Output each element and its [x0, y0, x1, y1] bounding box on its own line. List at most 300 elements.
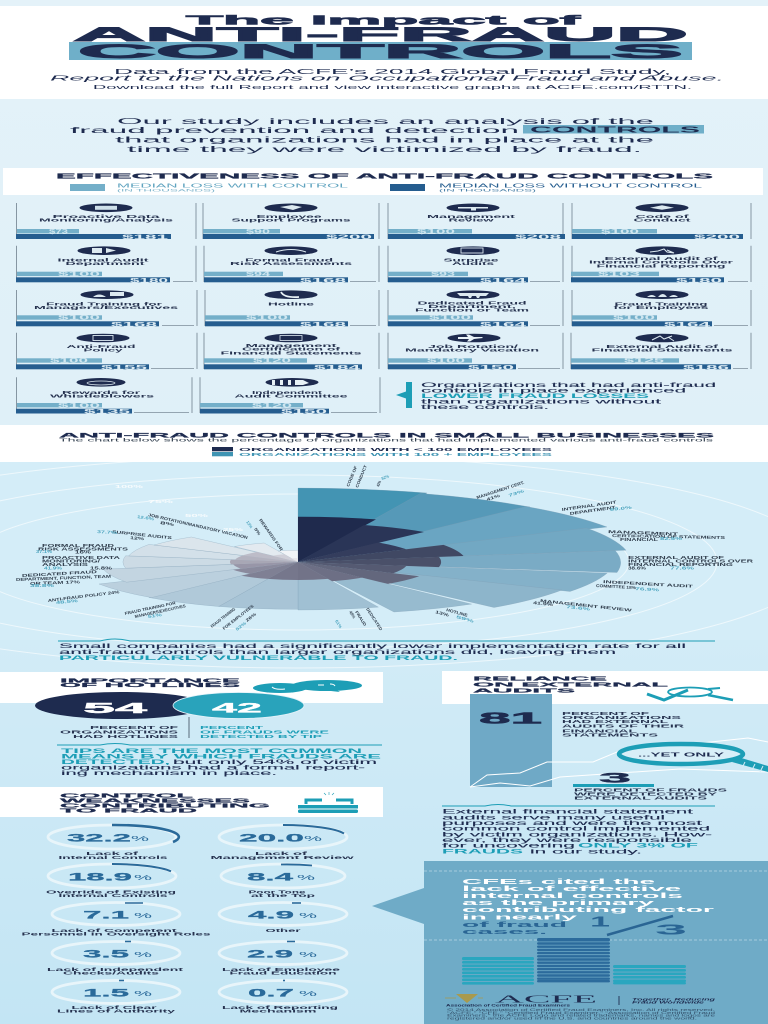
- chart: radial labels: REWARDS FOR: [258, 518, 284, 552]
- heading: OF HOTLINES: [60, 683, 241, 689]
- text: CFEs cited: cases.: [462, 927, 547, 936]
- text block: external audits paragraph: by victim organizations. How-: [442, 832, 712, 838]
- heading: TO FRAUD: [60, 808, 197, 814]
- card: Fraud Training for Employees: for Employees: [614, 305, 710, 310]
- chart: radial labels: 48.5%: [56, 598, 79, 605]
- ring: poor tone at the top: at the Top: [251, 893, 316, 898]
- source text: Data from the ACFE’s 2014 Global Fraud Study,: [114, 69, 671, 76]
- ring: lack of reporting mechanism: 0.7: [248, 988, 294, 1000]
- chart: radial labels: 73.6%: [566, 604, 591, 612]
- panel: effectiveness heading and legend: [3, 168, 763, 195]
- card: Independent Audit Committee: $150: [281, 408, 329, 415]
- card: Formal Fraud Risk Assessments: Formal Fraud: [245, 258, 334, 262]
- fine print: [447, 1008, 715, 1020]
- panel: CFE callout: [372, 861, 768, 1024]
- magnifier: yet only: [619, 744, 768, 772]
- chart: radial labels: DEDICATED FRAUD: [22, 569, 97, 578]
- card: Fraud Training for Managers: Fraud Training for: [46, 301, 163, 306]
- card: Formal Fraud Risk Assessments: $168: [300, 277, 348, 284]
- ring: lack of internal controls: %: [131, 836, 149, 843]
- ring: other: Other: [266, 928, 301, 933]
- chart: radial labels: 13%: [245, 520, 254, 529]
- chart: radial labels: 41%: [486, 493, 501, 502]
- text: CFEs cited: as the primary: [462, 898, 657, 907]
- card: Job Rotation: $100: [427, 359, 467, 365]
- fine print: “ACFE,” “CFE,” “Certified Fraud Examiner,” “Association of Certified Fraud: [447, 1011, 715, 1015]
- chart: radial labels: 43%: [375, 480, 382, 487]
- panel: reliance on external audits: [442, 671, 768, 856]
- chart: radial labels: 41.9%: [533, 600, 554, 607]
- text: CFEs cited: lack of effective: [462, 884, 681, 893]
- card: Employee Support Programs: Employee: [256, 214, 323, 219]
- column: 81 percent: [470, 694, 552, 787]
- fraction: one third: 1: [590, 914, 610, 930]
- card: Management Review: Review: [448, 218, 495, 222]
- card: Internal Audit Department: $180: [130, 277, 170, 284]
- callout: lower fraud losses: these controls.: [421, 404, 550, 411]
- chart: radial labels: ANALYSIS: [42, 562, 89, 567]
- panel: small business heading and legend: The chart below shows the percentage of organizations that had implemented various anti-fraud controls: [59, 438, 715, 442]
- chart: radial labels: 16%: [75, 550, 92, 554]
- label: percent of frauds detected by tip: DETECTED BY TIP: [200, 734, 322, 739]
- logo: ACFE: Association of Certified Fraud Examiners: [446, 1004, 570, 1008]
- icon: bracket arrow: [396, 382, 412, 408]
- chart: radial labels: CERTIFICATION OF STATEMENTS: [612, 533, 726, 540]
- chart: sectors for organizations with 100+ employees: [99, 488, 626, 612]
- chart: radial labels: DEDICATED: [365, 607, 384, 631]
- chart: radial labels: 12%: [130, 535, 145, 541]
- label: percent of organizations: PERCENT OF: [90, 725, 179, 730]
- ring group: weakness rates: [22, 825, 355, 1013]
- title: CONTROLS: [78, 41, 683, 63]
- card: Hotline: $100: [246, 316, 290, 322]
- text: percent of organizations had external audits: [562, 711, 686, 737]
- chart: radial labels: 69.0%: [610, 505, 633, 512]
- card: Rewards for Whistleblowers: [16, 377, 192, 415]
- icon: broken controls: [298, 792, 358, 813]
- text: CFEs cited: [462, 877, 714, 936]
- ring: lack of clear lines of authority: %: [134, 991, 152, 998]
- card: Fraud Training for Managers: Managers/Executives: [34, 305, 180, 310]
- card: Hotline: [205, 290, 379, 328]
- chart: radial labels: DEPARTMENT: [569, 505, 616, 516]
- ring: poor tone at the top: Poor Tone: [248, 889, 307, 894]
- card: Fraud Training for Managers: [16, 290, 197, 328]
- chart: radial labels: 75%: [148, 499, 174, 504]
- card: Employee Support Programs: $90: [246, 229, 272, 235]
- card: Rewards for Whistleblowers: $135: [84, 408, 132, 415]
- card: Rewards for Whistleblowers: $100: [58, 403, 102, 409]
- logo: ACFE: [445, 994, 717, 1008]
- card: External Audit of Internal Controls: Internal Controls Over: [589, 260, 734, 265]
- ring: lack of internal controls: Lack of: [86, 851, 139, 856]
- panel: small business heading and legend: ANTI-FRAUD CONTROLS IN SMALL BUSINESSES: [59, 432, 714, 439]
- panel: importance of hotlines: [0, 672, 383, 777]
- card: Fraud Training for Employees: $100: [613, 316, 657, 322]
- logo: ACFE: ACFE: [495, 994, 597, 1006]
- card: Independent Audit Committee: [200, 377, 380, 415]
- ring: override of existing controls: Override of Existing: [46, 889, 177, 894]
- card: Job Rotation: $150: [468, 364, 516, 371]
- column: 81 percent: 81: [479, 710, 542, 728]
- card: Fraud Training for Employees: Fraud Training: [614, 301, 708, 306]
- panel: effectiveness heading and legend: (IN THOUSANDS): [117, 188, 217, 192]
- callout: lower fraud losses: [396, 382, 717, 411]
- circle: 42 percent: 42: [212, 700, 262, 716]
- text: CFEs cited: of fraud: [462, 920, 569, 929]
- card: Surprise Audits: [388, 246, 563, 284]
- heading: ON EXTERNAL: [473, 682, 670, 688]
- card: Anti-Fraud Policy: $155: [101, 364, 149, 371]
- heading: WEAKNESSES: [60, 798, 251, 804]
- ring: lack of management review: Management Review: [210, 855, 355, 860]
- callout: lower fraud losses: LOWER FRAUD LOSSES: [421, 393, 651, 400]
- card: Management Certification: Certification of: [242, 347, 342, 352]
- text block: tips: [57, 744, 383, 777]
- ring: lack of clear lines of authority: Lack of Clear: [72, 1005, 157, 1010]
- ring: lack of competent personnel: [22, 902, 212, 936]
- card: Independent Audit Committee: Audit Committee: [234, 394, 349, 399]
- coin stack: left: [462, 957, 534, 985]
- panel: small business heading and legend: ORGANIZATIONS WITH 100 + EMPLOYEES: [239, 452, 555, 458]
- chart: radial labels: 8%: [160, 520, 175, 527]
- ring: lack of reporting mechanism: %: [299, 991, 317, 998]
- chart: radial labels: CONDUCT: [354, 464, 368, 488]
- ring: lack of management review: 20.0: [239, 832, 304, 844]
- card: Surprise Audits: $93: [431, 272, 457, 278]
- card: Formal Fraud Risk Assessments: [204, 246, 379, 284]
- intro text: that organizations had in place at the: [115, 134, 655, 144]
- card: Management Certification: Management: [246, 343, 338, 348]
- card: Management Review: Management: [427, 214, 517, 219]
- chart: radial labels: INTERNAL AUDIT: [561, 499, 617, 512]
- chart: radial labels: CODE OF: [345, 465, 358, 487]
- callout: lower fraud losses: than organizations without: [421, 398, 662, 406]
- label: percent of organizations: ORGANIZATIONS: [60, 730, 178, 734]
- chart: radial labels: MANAGEMENT: [608, 529, 679, 536]
- fine print: Examiners,” the ACFE Logo and related trademarks, names and logos are: [447, 1014, 715, 1018]
- heading: AUDITS: [473, 688, 576, 694]
- text block: small companies: PARTICULARLY VULNERABLE TO FRAUD.: [59, 655, 458, 662]
- ring: lack of independent checks: Checks/Audits: [63, 970, 160, 975]
- chart: radial labels: ANTI-FRAUD POLICY 24%: [48, 589, 120, 603]
- intro text: Our study includes an analysis of the: [117, 116, 655, 126]
- text: percent of organizations had external audits: STATEMENTS: [562, 732, 658, 737]
- ring: lack of employee fraud education: 2.9: [247, 948, 293, 960]
- text: CFEs cited: in nearly: [462, 912, 580, 922]
- text block: tips: TIPS ARE THE MOST COMMON: [61, 748, 363, 755]
- ring: lack of clear lines of authority: Lines of Authority: [57, 1008, 176, 1013]
- panel: effectiveness heading and legend: MEDIAN LOSS WITHOUT CONTROL: [439, 183, 703, 189]
- chart: radial labels: 41.9%: [44, 566, 63, 570]
- text block: small companies: anti-fraud controls than larger organizations did, leaving them: [59, 649, 616, 656]
- card: Rewards for Whistleblowers: Rewards for: [62, 390, 141, 395]
- ring: lack of clear lines of authority: [52, 980, 180, 1013]
- card: Rewards for Whistleblowers: Whistleblowers: [50, 394, 156, 399]
- chart: radial labels: COMMITTEE 18%: [596, 583, 637, 590]
- card: Fraud Training for Managers: $168: [111, 321, 159, 328]
- intro text: time they were victimized by fraud.: [127, 144, 642, 154]
- title: The Impact of: [186, 12, 583, 28]
- chart: radial labels: EXTERNAL AUDIT OF: [628, 555, 725, 560]
- panel: effectiveness bar cards: [16, 203, 751, 415]
- panel: effectiveness heading and legend: MEDIAN LOSS WITH CONTROL: [117, 183, 349, 189]
- chart: radial labels: JOB ROTATION/MANDATORY VACATION: [148, 512, 248, 540]
- text: CFEs cited: internal controls: [462, 891, 683, 900]
- chart: radial labels: FRAUD: [354, 610, 368, 627]
- ring: lack of employee fraud education: Lack of Employee: [222, 967, 341, 972]
- label: percent of frauds detected by tip: PERCENT: [200, 725, 264, 730]
- icon: speech bubbles: [253, 680, 362, 693]
- fraction: one third: [590, 914, 687, 938]
- card: Internal Audit Department: Department: [66, 261, 146, 266]
- ring: lack of competent personnel: 7.1: [83, 910, 129, 922]
- card: Dedicated Fraud Department: $100: [429, 316, 473, 322]
- card: Dedicated Fraud Department: Dedicated Fraud: [418, 300, 527, 305]
- heading: [60, 678, 241, 689]
- card: Surprise Audits: Audits: [452, 261, 496, 266]
- chart: radial labels: RISK ASSESSMENTS: [38, 546, 129, 552]
- statistic: 3 percent: 3: [599, 770, 632, 786]
- heading: RELIANCE: [473, 676, 608, 682]
- card: Employee Support Programs: $200: [326, 234, 374, 241]
- text block: external audits paragraph: for uncovering: [442, 843, 576, 850]
- ring: override of existing controls: %: [134, 875, 152, 882]
- text block: external audits paragraph: common control implemented: [442, 826, 711, 833]
- title: [69, 12, 692, 63]
- ring: lack of internal controls: 32.2: [67, 832, 131, 844]
- text block: external audits paragraph: ONLY 3% OF: [578, 843, 698, 850]
- card: Dedicated Fraud Department: $164: [480, 321, 528, 328]
- ring: lack of reporting mechanism: [219, 980, 347, 1013]
- chart: radial labels: 25%: [223, 527, 244, 532]
- chart: radial labels: MANAGERS/EXECUTIVES: [134, 603, 186, 619]
- callout: lower fraud losses: Organizations that had anti-fraud: [421, 382, 717, 389]
- icon: magnifier with check: [647, 688, 733, 700]
- card: Dedicated Fraud Department: Department,: [428, 304, 516, 309]
- coin stack: center: [537, 938, 610, 982]
- ring: lack of clear lines of authority: 1.5: [83, 988, 129, 1000]
- card: Code of Conduct: Code of: [636, 214, 690, 219]
- card: External Audit of Financial Statements: [571, 333, 751, 371]
- ring: lack of competent personnel: Personnel in Oversight Roles: [22, 932, 212, 936]
- chart: radial labels: [16, 464, 753, 632]
- card: Independent Audit Committee: Independent: [252, 390, 323, 395]
- card: External Audit of Financial Statements: $125: [624, 359, 666, 365]
- statistic: 3 percent: EXTERNAL AUDITS: [574, 796, 707, 801]
- ring: lack of employee fraud education: Fraud Education: [230, 970, 337, 975]
- card: External Audit of Internal Controls: $180: [676, 277, 724, 284]
- label: percent of organizations: [60, 717, 189, 739]
- text: CFEs cited: CFEs cited the: [462, 877, 655, 886]
- card: Management Review: $208: [515, 234, 563, 241]
- circle: 54 percent: [35, 692, 207, 719]
- chart: radial labels: PROACTIVE DATA: [42, 555, 120, 560]
- ring: lack of management review: [210, 825, 355, 860]
- text block: external audits paragraph: FRAUDS: [442, 848, 525, 856]
- chart: radial labels: 38.6%: [628, 566, 647, 570]
- chart: radial labels: 51%: [147, 612, 163, 619]
- logo: ACFE: Together, Reducing: [632, 998, 717, 1002]
- card: Job Rotation: Mandatory Vacation: [405, 348, 540, 353]
- chart: radial labels: 77.6%: [670, 566, 695, 570]
- card: External Audit of Internal Controls: External Audit of: [604, 256, 719, 261]
- chart: sectors for organizations with under 100 employees: [230, 517, 464, 584]
- ring: override of existing controls: Internal Controls: [58, 893, 169, 898]
- card: Proactive Data Monitoring: Monitoring/Analysis: [39, 218, 175, 222]
- ring: lack of management review: Lack of: [255, 851, 308, 856]
- chart: radial labels: SURPRISE AUDITS: [112, 529, 173, 540]
- ring: lack of employee fraud education: [219, 942, 347, 975]
- card: External Audit of Financial Statements: $186: [683, 364, 731, 371]
- heading: [60, 794, 272, 814]
- text block: tips: MEANS BY WHICH FRAUDS ARE: [61, 754, 383, 760]
- chart: radial labels: 37.1%: [36, 549, 52, 554]
- chart: polar area of controls in small businesses: [0, 456, 768, 668]
- chart: radial labels: 59%: [456, 614, 475, 624]
- panel: small business heading and legend: ORGANIZATIONS WITH < 100 EMPLOYEES: [239, 447, 555, 453]
- source text: [50, 69, 724, 91]
- ring: poor tone at the top: [221, 864, 345, 898]
- chart: radial labels: 76.9%: [635, 586, 660, 592]
- text: percent of organizations had external audits: ORGANIZATIONS: [562, 715, 681, 720]
- card: Management Certification: $120: [253, 359, 293, 365]
- label: percent of frauds detected by tip: [200, 725, 329, 739]
- card: Anti-Fraud Policy: Anti-Fraud: [66, 344, 136, 349]
- card: Fraud Training for Employees: [572, 290, 751, 328]
- chart: radial labels: MANAGEMENT CERT.: [476, 480, 525, 500]
- card: Internal Audit Department: [16, 246, 196, 284]
- card: Employee Support Programs: [203, 203, 379, 241]
- ring: lack of independent checks: Lack of Independent: [47, 967, 184, 972]
- card: Management Certification: $184: [314, 364, 362, 371]
- card: Internal Audit Department: $100: [58, 272, 102, 278]
- ring: lack of competent personnel: %: [134, 913, 152, 920]
- card: Dedicated Fraud Department: [388, 290, 563, 328]
- coin stack: right: [613, 965, 686, 984]
- intro text: [70, 116, 704, 154]
- chart: radial labels: 15.8%: [90, 566, 113, 570]
- text block: tips: ing mechanism in place.: [61, 770, 278, 777]
- ring: lack of management review: %: [304, 836, 322, 843]
- card: Management Certification: Financial Statements: [220, 350, 363, 355]
- card: Proactive Data Monitoring: $73: [49, 229, 69, 235]
- ring: lack of competent personnel: Lack of Competent: [52, 928, 178, 933]
- text block: external audits paragraph: External financial statement: [442, 809, 694, 816]
- ring: other: %: [299, 913, 317, 920]
- chart: radial labels: 82.5%: [660, 536, 683, 541]
- chart: radial labels: FRAUD TRAINING: [210, 606, 236, 629]
- ring: lack of reporting mechanism: Mechanism: [240, 1008, 316, 1013]
- card: External Audit of Internal Controls: Financial Reporting: [596, 263, 726, 268]
- card: Management Review: [388, 203, 565, 241]
- card: Job Rotation: [388, 333, 563, 371]
- card: Fraud Training for Employees: $164: [664, 321, 712, 328]
- chart: radial labels: FRAUD TRAINING FOR: [124, 600, 176, 616]
- ring: override of existing controls: [46, 864, 177, 898]
- panel: effectiveness heading and legend: (IN THOUSANDS): [439, 188, 538, 192]
- text block: external audits paragraph: in our study.: [530, 848, 643, 856]
- card: Surprise Audits: $164: [480, 277, 528, 284]
- circle: 42 percent: [173, 692, 304, 718]
- card: External Audit of Financial Statements: External Audit of: [606, 344, 720, 349]
- ring: lack of internal controls: Internal Controls: [58, 855, 169, 860]
- text: percent of organizations had external audits: FINANCIAL: [562, 728, 638, 733]
- ring: lack of independent checks: 3.5: [83, 948, 129, 960]
- text block: tips: organizations had a formal report-: [61, 764, 365, 772]
- card: Code of Conduct: Conduct: [634, 218, 692, 222]
- card: Management Review: $100: [417, 229, 457, 235]
- chart: radial labels: 26%: [245, 611, 257, 623]
- chart: radial labels: 82%: [381, 473, 390, 481]
- ring: poor tone at the top: %: [297, 875, 315, 882]
- label: percent of frauds detected by tip: OF FRAUDS WERE: [200, 730, 329, 734]
- card: Dedicated Fraud Department: Function or Team: [415, 308, 529, 313]
- source text: Report to the Nations on Occupational Fraud and Abuse.: [50, 76, 724, 82]
- header panel: [0, 6, 768, 99]
- statistic: 3 percent: [573, 770, 727, 801]
- card: Anti-Fraud Policy: [16, 333, 197, 371]
- text block: small companies: Small companies had a significantly lower implementation rate for all: [59, 643, 688, 650]
- ring: lack of independent checks: [47, 942, 184, 975]
- ring: lack of internal controls: [48, 825, 179, 860]
- text: percent of organizations had external audits: PERCENT OF: [562, 711, 650, 716]
- chart: radial labels: FORMAL FRAUD: [42, 543, 114, 548]
- circle: 54 percent: 54: [83, 700, 150, 717]
- card: Hotline: $168: [300, 321, 348, 328]
- chart: radial labels: HOTLINE: [446, 607, 469, 618]
- ring: override of existing controls: 18.9: [68, 872, 132, 884]
- text: CFEs cited: contributing factor: [462, 905, 714, 914]
- chart: radial labels: 73%: [508, 488, 525, 498]
- ring: lack of employee fraud education: %: [299, 952, 317, 959]
- text block: external audits paragraph: [442, 804, 715, 856]
- card: Independent Audit Committee: $120: [252, 403, 294, 409]
- heading: CONTROL: [60, 794, 195, 800]
- panel: effectiveness heading and legend: EFFECTIVENESS OF ANTI-FRAUD CONTROLS: [56, 173, 714, 180]
- text block: tips: but only 54% of victim: [173, 759, 377, 766]
- card: Formal Fraud Risk Assessments: Risk Assessments: [230, 261, 354, 266]
- chart: radial labels: 38.8%: [30, 583, 55, 588]
- text block: external audits paragraph: ever, they were responsible: [442, 837, 693, 844]
- card: External Audit of Internal Controls: [571, 246, 751, 284]
- card: Code of Conduct: $200: [694, 234, 742, 241]
- chart: radial labels: FOR EMPLOYEES: [222, 603, 255, 631]
- chart: radial labels: FINANCIAL REPORTING: [628, 562, 733, 567]
- card: Proactive Data Monitoring: $181: [122, 234, 170, 241]
- chart: radial labels: MANAGEMENT REVIEW: [540, 598, 632, 613]
- text block: external audits paragraph: purposes and were the most: [442, 820, 703, 827]
- card: Job Rotation: Job Rotation/: [428, 344, 520, 349]
- title: ANTI-FRAUD: [73, 24, 688, 46]
- card: Surprise Audits: Surprise: [444, 258, 500, 262]
- text block: small companies: [58, 639, 715, 662]
- heading: IMPORTANCE: [60, 678, 241, 684]
- chart: radial labels: INDEPENDENT AUDIT: [603, 579, 694, 589]
- heading: [473, 676, 670, 694]
- card: Fraud Training for Managers: $100: [58, 316, 102, 322]
- chart: radial labels: INTERNAL CONTROLS OVER: [628, 558, 753, 564]
- chart: radial labels: 37.7%: [97, 529, 118, 535]
- fine print: registered and/or used in the U.S. and countries around the world.: [447, 1016, 697, 1020]
- card: Management Certification: [204, 333, 379, 371]
- source text: Download the full Report and view interactive graphs at ACFE.com/RTTN.: [93, 85, 692, 91]
- intro text: CONTROLS: [530, 124, 701, 134]
- card: Hotline: Hotline: [268, 301, 316, 306]
- magnifier: yet only: ...YET ONLY: [638, 752, 725, 758]
- text block: tips: DETECTED,: [61, 759, 170, 766]
- chart: radial labels: 61%: [334, 619, 343, 629]
